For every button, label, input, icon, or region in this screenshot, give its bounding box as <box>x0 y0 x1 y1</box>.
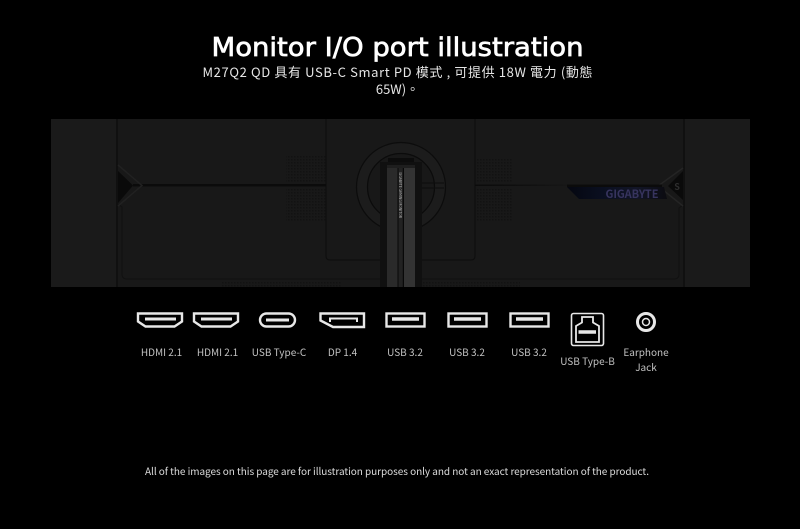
port labels: USB 3.2 <box>387 344 423 359</box>
icon: USB 3.2 third <box>510 314 548 326</box>
subtitle: M27Q2 QD 具有 USB-C Smart PD 模式 , 可提供 18W 電力 (動態 <box>202 62 592 81</box>
monitor dot textures <box>222 155 520 287</box>
monitor side strips <box>116 119 685 287</box>
monitor right notch: S <box>674 180 680 193</box>
port labels: Earphone <box>623 344 669 359</box>
icon: earphone jack <box>638 314 654 330</box>
icon: USB Type-B <box>572 314 604 346</box>
footer note: All of the images on this page are for illustration purposes only and not an exact representation of the product. <box>145 463 649 478</box>
monitor stand neck <box>380 158 422 287</box>
port labels: DP 1.4 <box>328 344 358 359</box>
port labels <box>141 344 669 374</box>
monitor inner area <box>117 119 684 287</box>
port labels: USB Type-B <box>560 353 615 368</box>
monitor left notch <box>118 165 142 206</box>
icon: USB Type-C <box>260 314 295 326</box>
monitor stand neck: GIGABYTE GAMING MONITOR <box>397 172 402 219</box>
port labels: USB Type-C <box>252 344 307 359</box>
subtitle <box>202 62 592 98</box>
monitor stand ring <box>356 142 446 232</box>
icon: HDMI 2.1 second <box>194 314 238 326</box>
port labels: USB 3.2 <box>511 344 547 359</box>
icon: HDMI 2.1 <box>138 314 182 326</box>
icon: USB 3.2 first <box>386 314 424 326</box>
GIGABYTE badge: GIGABYTE <box>606 186 659 202</box>
subtitle: 65W)。 <box>376 79 419 98</box>
monitor right notch <box>658 168 683 206</box>
GIGABYTE badge <box>567 184 667 202</box>
panel: monitor rear view <box>51 119 750 287</box>
port labels: HDMI 2.1 <box>141 344 182 359</box>
icon: DisplayPort <box>320 314 364 327</box>
monitor centre panel outline <box>326 119 475 260</box>
monitor lower panel outlines <box>118 204 683 279</box>
port labels: Jack <box>635 359 657 374</box>
port labels: HDMI 2.1 <box>197 344 238 359</box>
icon: USB 3.2 second <box>448 314 486 326</box>
monitor horizontal seam <box>133 184 567 186</box>
port labels: USB 3.2 <box>449 344 485 359</box>
title: Monitor I/O port illustration <box>212 33 584 63</box>
